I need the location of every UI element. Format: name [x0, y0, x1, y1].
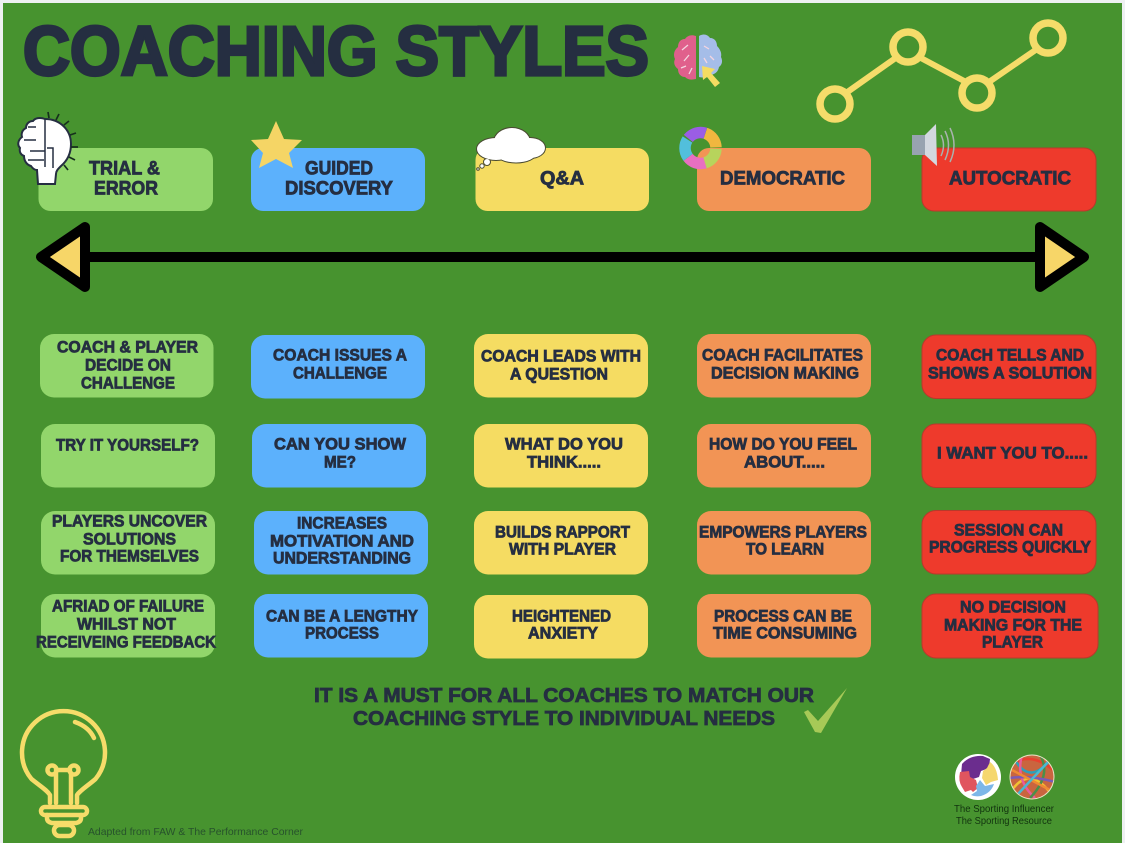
card: no decision making: PLAYER [982, 632, 1043, 652]
card: how do you feel: HOW DO YOU FEEL [709, 434, 857, 454]
card: I want you to: I WANT YOU TO..... [937, 444, 1088, 462]
logo: rubber band ball [1010, 754, 1054, 800]
card: coach tells and shows: SHOWS A SOLUTION [928, 364, 1092, 382]
panel: trial and error heading: TRIAL & [89, 158, 160, 180]
card: try it yourself [41, 424, 215, 488]
source credit: Adapted from FAW & The Performance Corner [88, 826, 303, 838]
panel: trial and error heading [38, 148, 213, 211]
card: can you show me: CAN YOU SHOW [274, 434, 407, 454]
card: builds rapport: BUILDS RAPPORT [495, 522, 631, 542]
icon: tick [804, 688, 847, 733]
panel: trial and error heading: ERROR [94, 178, 158, 200]
card: players uncover solutions: FOR THEMSELVES [60, 546, 199, 566]
card: session can progress quickly: PROGRESS QUICKLY [929, 538, 1092, 556]
card: no decision making [922, 594, 1098, 658]
card: what do you think [474, 424, 648, 488]
card: heightened anxiety: HEIGHTENED [512, 606, 611, 626]
card: afraid of failure [36, 594, 217, 658]
card: can you show me [252, 424, 426, 488]
card: coach leads with a question: COACH LEADS WITH [481, 346, 641, 366]
card: coach leads with a question [474, 334, 648, 398]
card: session can progress quickly [922, 510, 1096, 574]
column: Q and A cards [474, 334, 648, 658]
card: empowers players [697, 511, 871, 574]
card: increases motivation: MOTIVATION AND [270, 532, 414, 550]
card: coach and player decide: DECIDE ON [85, 356, 171, 374]
card: what do you think: WHAT DO YOU [505, 434, 623, 454]
card: coach and player decide [40, 334, 214, 398]
icon: colour ring [679, 126, 722, 170]
card: coach facilitates: COACH FACILITATES [702, 346, 863, 364]
logo: puzzle [955, 754, 1001, 800]
card: what do you think: THINK..... [527, 452, 601, 472]
card: coach and player decide: COACH & PLAYER [57, 338, 198, 356]
card: coach issues a challenge [251, 335, 425, 398]
icon: light bulb [22, 711, 105, 836]
card: no decision making: NO DECISION [960, 598, 1066, 616]
column: autocratic cards [922, 335, 1098, 658]
column: guided discovery cards [251, 335, 428, 658]
card: increases motivation [254, 511, 428, 574]
credits: sporting brands: The Sporting Resource [956, 815, 1052, 827]
card: builds rapport: WITH PLAYER [509, 540, 616, 558]
card: time consuming: TIME CONSUMING [713, 624, 857, 642]
icon: thought cloud [477, 128, 545, 170]
card: afraid of failure: RECEIVEING FEEDBACK [36, 632, 217, 652]
panel: guided discovery heading [251, 148, 425, 211]
card: empowers players: TO LEARN [746, 540, 824, 558]
card: heightened anxiety: ANXIETY [528, 624, 599, 642]
callout: key message: COACHING STYLE TO INDIVIDUAL NEEDS [353, 707, 775, 730]
card: try it yourself: TRY IT YOURSELF? [56, 436, 199, 454]
card: coach and player decide: CHALLENGE [81, 374, 175, 392]
chart icon: yellow line with nodes [820, 23, 1063, 119]
icon: speaker [912, 124, 954, 166]
card: time consuming: PROCESS CAN BE [714, 606, 852, 626]
column: democratic cards [697, 334, 871, 658]
card: how do you feel: ABOUT..... [744, 452, 825, 472]
card: lengthy process: PROCESS [305, 624, 379, 642]
card: I want you to [922, 424, 1096, 488]
arrow: double headed scale [41, 227, 1084, 287]
card: coach tells and shows: COACH TELLS AND [936, 346, 1084, 364]
panel: autocratic heading: AUTOCRATIC [949, 168, 1071, 190]
callout: key message: IT IS A MUST FOR ALL COACHES TO MATCH OUR [314, 684, 814, 707]
card: players uncover solutions: PLAYERS UNCOVER [52, 512, 207, 530]
card: lengthy process [254, 594, 428, 658]
card: how do you feel [697, 424, 871, 488]
card: coach leads with a question: A QUESTION [510, 364, 608, 384]
card: coach issues a challenge: COACH ISSUES A [273, 346, 407, 364]
card: increases motivation: INCREASES [297, 514, 387, 532]
card: time consuming [697, 594, 871, 658]
panel: Q and A heading [476, 148, 649, 211]
icon: half brain light bulb [18, 112, 78, 184]
card: coach facilitates [697, 334, 871, 398]
icon: star [251, 121, 302, 168]
column: trial and error cards [36, 334, 217, 658]
card: empowers players: EMPOWERS PLAYERS [699, 522, 867, 542]
card: coach tells and shows [922, 335, 1096, 398]
callout: key message [314, 684, 814, 730]
card: no decision making: MAKING FOR THE [944, 616, 1082, 634]
card: lengthy process: CAN BE A LENGTHY [266, 606, 419, 626]
panel: guided discovery heading: GUIDED [305, 158, 373, 180]
panel: guided discovery heading: DISCOVERY [285, 178, 393, 200]
card: afraid of failure: WHILST NOT [77, 614, 177, 634]
card: afraid of failure: AFRIAD OF FAILURE [52, 596, 204, 616]
card: coach facilitates: DECISION MAKING [711, 364, 859, 382]
title: COACHING STYLES [23, 12, 649, 90]
panel: democratic heading [697, 148, 871, 211]
credits: sporting brands: The Sporting Influencer [954, 803, 1054, 815]
panel: autocratic heading [922, 148, 1096, 211]
card: increases motivation: UNDERSTANDING [273, 548, 411, 568]
credits: sporting brands [954, 803, 1054, 827]
card: can you show me: ME? [324, 452, 356, 472]
card: players uncover solutions: SOLUTIONS [83, 530, 176, 548]
card: builds rapport [474, 511, 648, 574]
panel: democratic heading: DEMOCRATIC [720, 168, 845, 190]
card: heightened anxiety [474, 595, 648, 658]
card: players uncover solutions [41, 511, 215, 574]
panel: Q and A heading: Q&A [540, 168, 584, 190]
icon: brain with cursor [674, 35, 722, 87]
card: coach issues a challenge: CHALLENGE [293, 364, 387, 382]
card: session can progress quickly: SESSION CAN [954, 520, 1063, 540]
